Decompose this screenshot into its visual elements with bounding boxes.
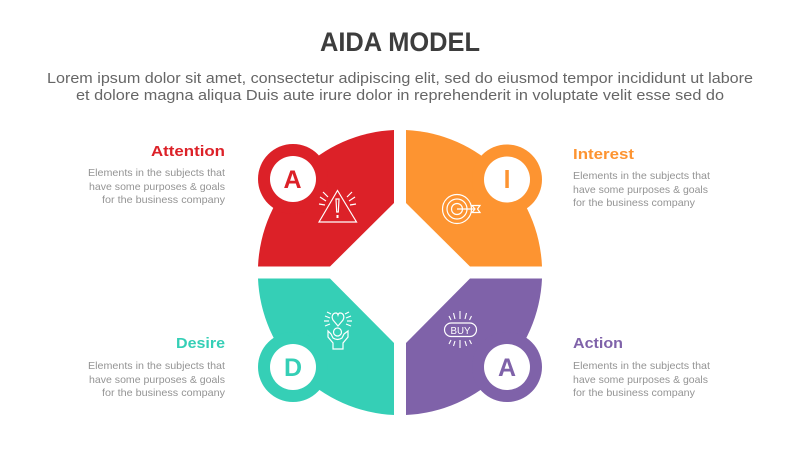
letter I [505, 170, 509, 188]
text block: interest: for the business company [573, 197, 696, 209]
icon: target with arrow [442, 194, 480, 224]
text block: action: Elements in the subjects that [573, 360, 710, 372]
icon: hands holding heart [324, 312, 352, 349]
title: AIDA MODEL [320, 27, 480, 57]
text block: desire: Desire [176, 335, 225, 352]
subtitle: Lorem ipsum dolor sit amet, consectetur adipiscing elit, sed do eiusmod tempor incididunt ut labore [47, 70, 753, 87]
panel: attention segment: A [283, 166, 302, 194]
icon: warning triangle [319, 190, 356, 222]
text block: attention: for the business company [102, 194, 226, 206]
text block: desire: Elements in the subjects that [88, 360, 225, 372]
subtitle [47, 70, 753, 104]
text block: interest: have some purposes & goals [573, 184, 708, 196]
text block: interest [573, 146, 710, 209]
text block: attention: have some purposes & goals [89, 181, 225, 193]
text block: desire: have some purposes & goals [89, 374, 225, 386]
text block: interest: Interest [573, 146, 634, 163]
panel: attention segment [258, 130, 394, 266]
panel: desire segment: D [284, 354, 302, 382]
panel: action segment [406, 278, 542, 415]
text block: action: for the business company [573, 387, 696, 399]
text block: attention: Elements in the subjects that [88, 167, 225, 179]
text block: attention [88, 143, 226, 206]
panel: interest segment [406, 130, 542, 266]
icon: buy button: BUY [450, 326, 471, 337]
text block: interest: Elements in the subjects that [573, 170, 710, 182]
subtitle: et dolore magna aliqua Duis aute irure dolor in reprehenderit in voluptate velit esse sed do [76, 87, 724, 104]
text block: desire: for the business company [102, 387, 226, 399]
text block: attention: Attention [151, 143, 225, 160]
text block: action: have some purposes & goals [573, 374, 708, 386]
text block: action: Action [573, 335, 623, 352]
panel: action segment: A [498, 354, 516, 382]
text block: action [573, 335, 710, 399]
text block: desire [88, 335, 226, 399]
panel: desire segment [258, 278, 394, 415]
